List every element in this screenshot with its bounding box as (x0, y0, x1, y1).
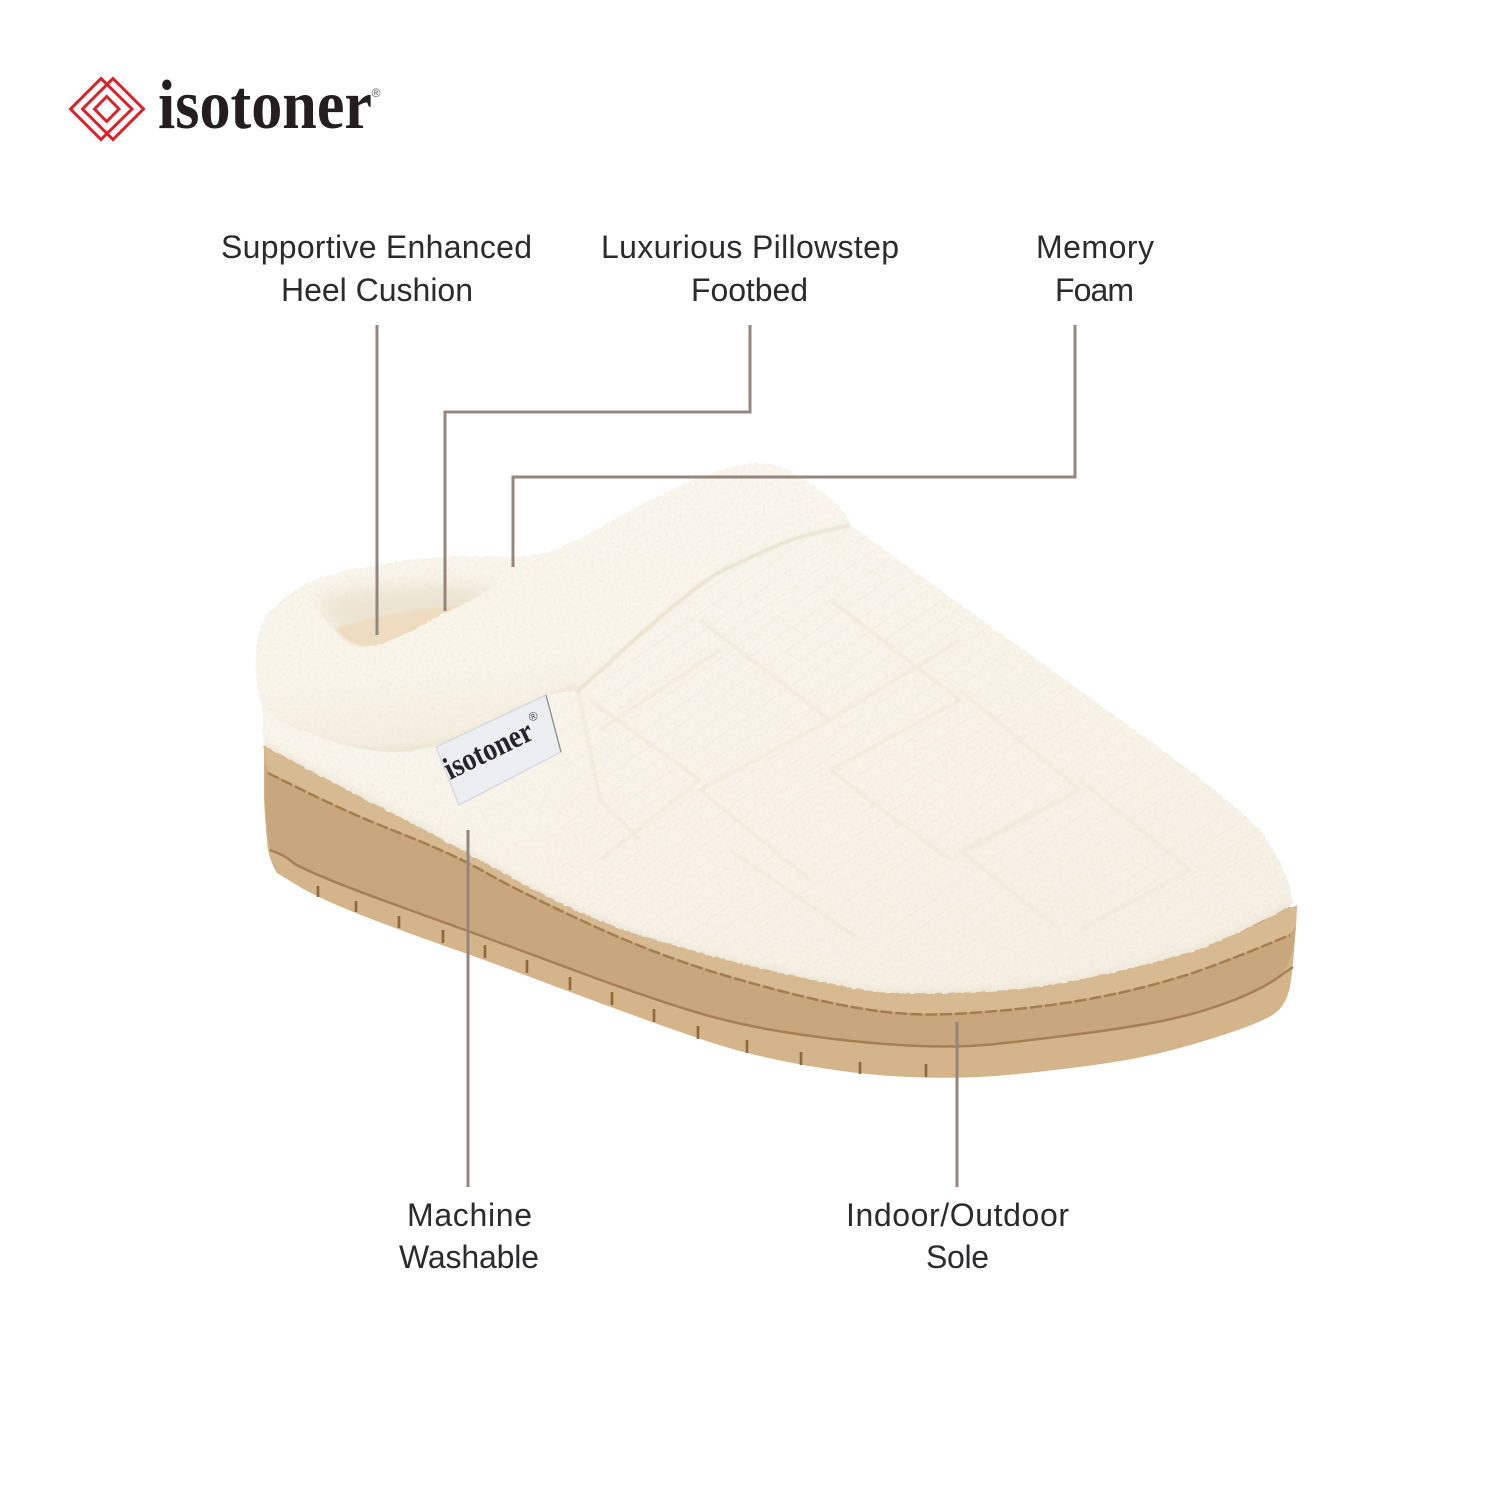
leader: memory foam (513, 325, 1075, 567)
label: machine washable: Washable (399, 1239, 539, 1275)
slipper interior lining (318, 585, 500, 649)
label: indoor/outdoor sole: Indoor/Outdoor (846, 1197, 1069, 1233)
woven brand tag: isotoner (437, 712, 538, 786)
label: machine washable: Machine (407, 1197, 532, 1233)
leader: pillowstep footbed (445, 325, 750, 611)
logo (70, 67, 381, 144)
leader: indoor/outdoor sole (956, 1022, 958, 1187)
midsole band (265, 765, 1296, 1046)
label: memory foam: Memory (1036, 229, 1154, 265)
wordmark: isotoner (158, 67, 372, 144)
terry upper (262, 525, 1292, 993)
label: machine washable (399, 1197, 539, 1275)
callout leader lines (377, 325, 1075, 1187)
label: supportive enhanced heel cushion: Heel Cushion (281, 272, 473, 308)
registered mark: ® (372, 86, 381, 100)
outsole (264, 745, 1297, 1078)
welt trim (263, 745, 1297, 1014)
label: memory foam (1036, 229, 1154, 308)
midsole groove (270, 850, 1293, 1046)
label: memory foam: Foam (1055, 272, 1134, 308)
slipper illustration (250, 460, 1300, 1078)
woven brand tag: ® (526, 708, 540, 725)
label: indoor/outdoor sole: Sole (926, 1239, 989, 1275)
stitching line (268, 773, 1290, 1015)
sole tread notches (318, 886, 926, 1077)
label: supportive enhanced heel cushion: Supportive Enhanced (221, 229, 532, 265)
woven brand tag (436, 695, 561, 805)
collar underside shadow (250, 460, 860, 760)
infographic canvas (68, 76, 1297, 1268)
leader: heel cushion (376, 325, 378, 635)
label: indoor/outdoor sole (846, 1197, 1069, 1275)
label: luxurious pillowstep footbed: Luxurious Pillowstep (601, 229, 899, 265)
label: luxurious pillowstep footbed: Footbed (691, 272, 808, 308)
plush collar (256, 463, 850, 752)
collar seam shadow (576, 525, 850, 692)
leader: machine washable (466, 830, 470, 1187)
front collar roll (257, 463, 850, 752)
icon: red diamond mark (70, 78, 144, 140)
label: supportive enhanced heel cushion (221, 229, 532, 308)
label: luxurious pillowstep footbed (601, 229, 899, 308)
upper shading and quilt texture (260, 520, 1300, 1000)
